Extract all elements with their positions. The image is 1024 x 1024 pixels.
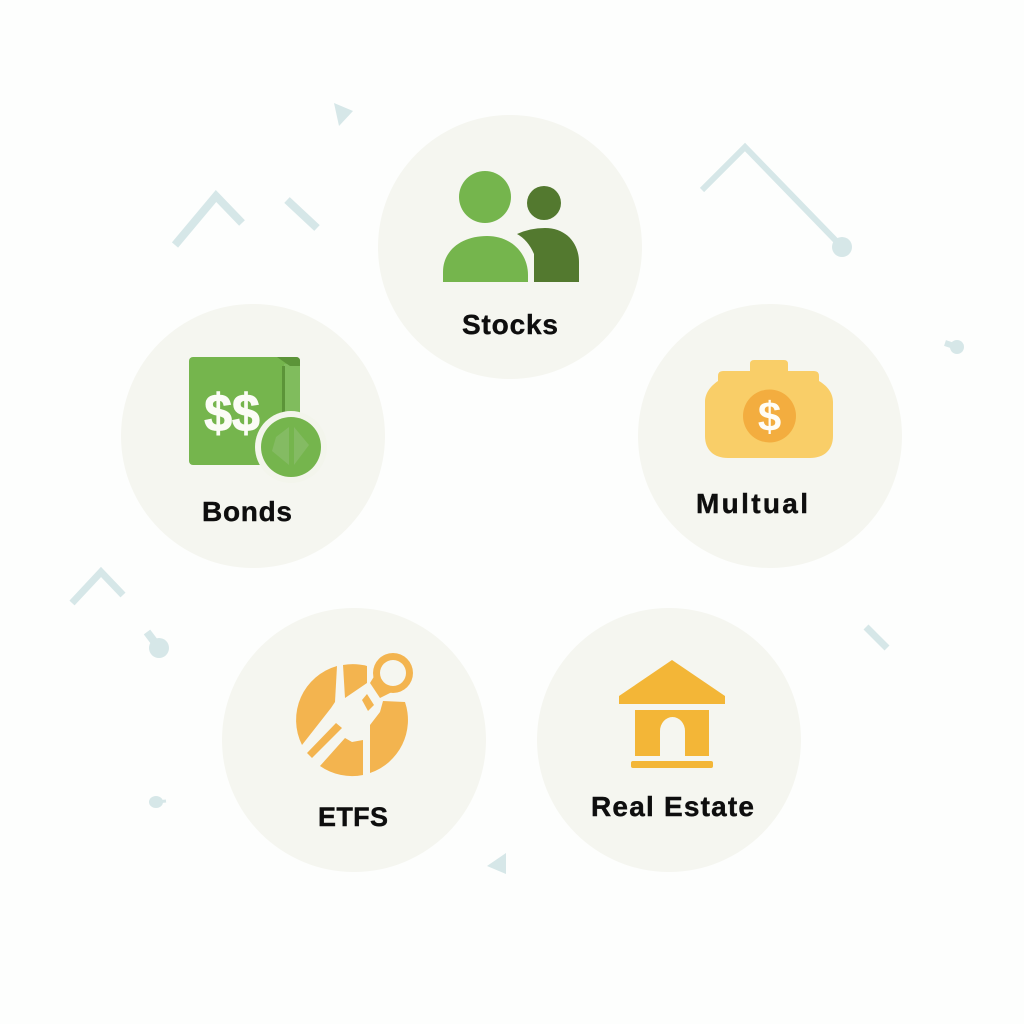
panel: etfs xyxy=(222,608,486,872)
label: multual: Multual xyxy=(696,488,808,519)
icon: house xyxy=(619,660,725,768)
icon: pie with key xyxy=(296,653,413,776)
panel: mutual xyxy=(638,304,902,568)
panel: real estate xyxy=(537,608,801,872)
label: real estate: Real Estate xyxy=(591,791,754,822)
icon: camera-shaped coin case xyxy=(705,360,833,458)
icon: banknote with coin: $$ xyxy=(204,384,260,442)
panel: stocks xyxy=(378,115,642,379)
panel: bonds xyxy=(121,304,385,568)
label: etfs: ETFS xyxy=(318,802,388,832)
label: bonds: Bonds xyxy=(202,496,292,527)
icon: camera-shaped coin case: $ xyxy=(758,393,781,440)
icon: people xyxy=(443,171,579,282)
decorative background shapes xyxy=(72,103,964,874)
label: stocks: Stocks xyxy=(462,309,558,340)
icon: banknote with coin xyxy=(189,357,327,483)
